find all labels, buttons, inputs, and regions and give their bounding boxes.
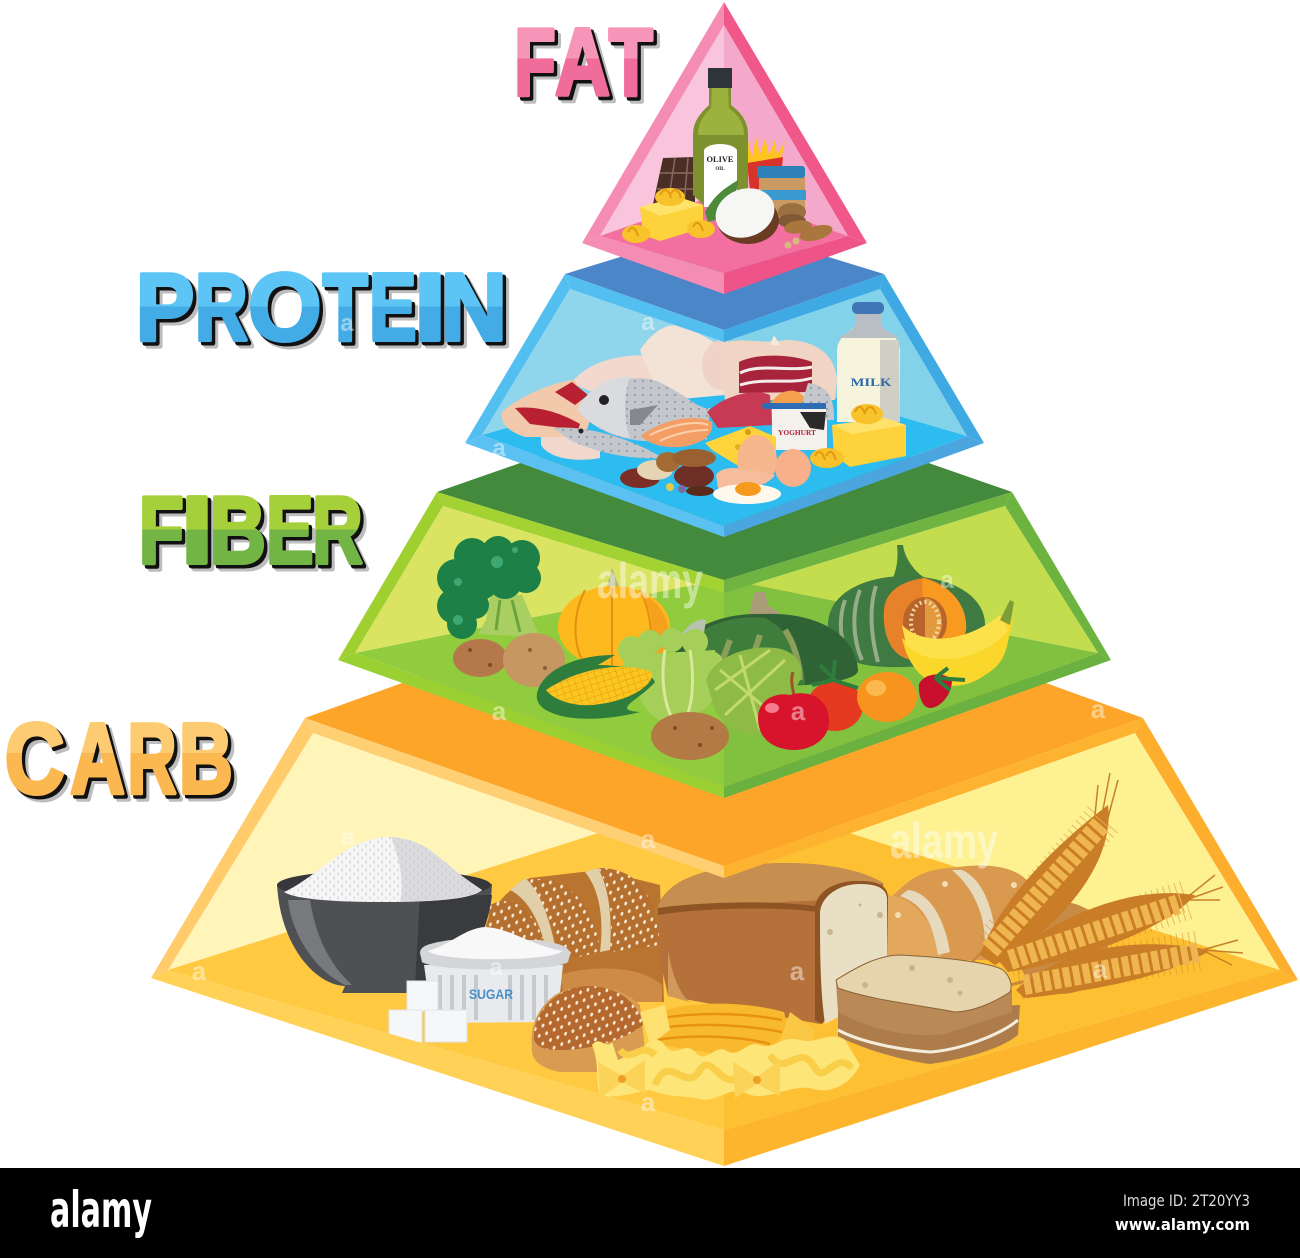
watermarks: a [489,954,503,981]
label: FAT: T [612,12,656,119]
label: PROTEIN: O [254,260,328,367]
protein left wall [482,289,724,435]
label: PROTEIN: O [248,254,322,361]
label: FAT: F [514,9,556,116]
label: PROTEIN: R [198,257,251,364]
carb right wall [724,733,1280,970]
label: PROTEIN: T [326,257,371,364]
label: FIBER [139,477,369,590]
label: PROTEIN: N [441,254,507,361]
label: FIBER: I [184,480,216,587]
food: strawberry [919,668,965,708]
food: chicken pile [541,325,837,460]
label: PROTEIN: E [372,257,420,364]
label: FIBER: I [187,483,219,590]
label: FAT: T [609,9,653,116]
food: artichoke [706,647,801,735]
watermarks: a [791,696,806,726]
food: peanut butter jar [757,166,806,217]
footer bar [0,1168,1300,1258]
label: FIBER: R [312,477,363,584]
label: PROTEIN: I [414,254,446,361]
label: PROTEIN: I [420,260,452,367]
label: FIBER: B [210,477,266,584]
watermarks: a [192,956,207,986]
footer logo: alamy [50,1181,152,1239]
food: potatoes left [453,633,565,687]
watermarks [192,309,1108,1117]
food: tomato [807,660,863,731]
food: sardine [553,427,663,458]
watermarks: a [1091,694,1106,724]
watermarks: a [641,824,656,854]
tier: carb [151,567,1298,1166]
food: sliced bread loaf [658,863,888,1024]
food: milk bottle: MILK [850,375,892,389]
label: FAT: A [555,9,610,116]
watermarks: alamy [597,553,703,609]
food: coconut [709,180,781,246]
label: PROTEIN: E [369,254,417,361]
label: FIBER: E [266,477,314,584]
label: FIBER: B [212,480,269,587]
fiber plate [437,392,1012,580]
label: PROTEIN: P [139,257,197,364]
label: FAT [514,9,659,122]
fiber frame [338,492,1111,798]
food: eggs [716,435,811,489]
food: peanuts [783,219,834,248]
label: PROTEIN: I [417,257,449,364]
food: olive oil bottle: OLIVE [706,155,734,164]
watermarks: a [340,310,354,337]
label: PROTEIN: O [251,257,325,364]
food: cut kabocha [828,545,985,667]
label: CARB: A [73,706,128,818]
food: apple [758,672,829,750]
protein floor [482,365,967,526]
fiber left wall [355,506,724,653]
food: corn [537,655,655,719]
food: yoghurt [762,383,834,450]
label: CARB: C [11,709,71,821]
label: FAT: T [615,15,659,122]
label: PROTEIN: E [375,260,423,367]
watermarks: a [641,1087,656,1117]
food: olive oil bottle: OIL [715,167,725,172]
watermarks: a [641,309,655,336]
food: wheat [972,773,1243,998]
watermarks: a [790,956,805,986]
image id: Image ID: 2T20YY3 [1123,1191,1250,1210]
fat right wall [724,25,848,236]
food: sugar cubes [389,981,467,1042]
label: PROTEIN: N [447,260,513,367]
label: PROTEIN: R [201,260,254,367]
label: FIBER: B [216,483,272,590]
food: bowl of rice [277,837,492,993]
food: yoghurt: YOGHURT [778,429,816,437]
food: green squash [672,592,858,686]
label: FAT: F [520,15,562,122]
label: FIBER: R [315,480,366,587]
label: FIBER: E [272,483,320,590]
label: FAT: A [561,15,616,122]
label: FIBER: E [269,480,317,587]
watermarks: a [940,567,954,594]
carb left wall [168,733,724,970]
tier: fat [582,2,867,294]
carb plate [305,567,1143,866]
watermarks: a [1093,954,1108,984]
food: lettuce [618,628,724,720]
food: orange [857,672,917,722]
fat left wall [600,25,724,236]
food: right bread loaf [888,865,1108,994]
label: CARB: A [76,709,131,821]
food: cookies [778,203,806,228]
label: CARB: B [185,709,239,821]
label: FAT: F [517,12,559,119]
food: salmon steak [641,418,712,447]
food: potato front [651,712,729,760]
label: FIBER: I [181,477,213,584]
label: CARB: R [133,709,183,821]
label: FIBER: F [142,480,187,587]
food: cheese [705,426,776,470]
label: FAT: A [558,12,613,119]
label: FIBER: F [145,483,190,590]
label: FIBER: F [139,477,184,584]
food: seeded baguette [486,868,664,1002]
label: CARB: R [130,706,180,818]
food: toast stack [836,955,1020,1064]
food: steak [502,380,590,437]
food: nuts [620,449,716,496]
label: PROTEIN: T [329,260,374,367]
food: banana [902,600,1014,686]
food: yellow pumpkin [558,568,670,668]
carb floor [168,793,1280,1130]
label: PROTEIN: N [444,257,510,364]
food: fried egg [713,482,781,504]
food: sugar ramekin: SUGAR [469,986,513,1002]
label: FIBER: R [318,483,369,590]
label: PROTEIN: P [136,254,194,361]
fiber floor [355,579,1098,787]
fiber right wall [724,506,1098,653]
label: PROTEIN: R [195,254,248,361]
food: sea bream [577,376,710,441]
food: red meat [707,392,772,428]
fat floor [600,192,848,273]
food: chocolate [653,157,695,204]
watermarks: a [492,435,506,462]
food: butter with curls [810,404,906,468]
website: www.alamy.com [1115,1215,1250,1234]
food: olive oil bottle [693,68,748,207]
food: seeded bun [532,986,645,1072]
food: broccoli [437,536,541,639]
label: CARB: C [8,706,68,818]
carb frame [151,718,1298,1166]
label: CARB: A [70,703,125,815]
protein frame [465,274,984,537]
protein plate [565,225,884,330]
label: CARB: B [179,703,233,815]
label: PROTEIN [136,254,513,367]
label: PROTEIN: P [142,260,200,367]
label: CARB: C [5,703,65,815]
label: CARB: B [182,706,236,818]
watermarks: a [492,696,507,726]
label: CARB [5,703,239,821]
watermarks: alamy [890,813,998,869]
protein right wall [724,289,967,436]
food: butter block [622,188,715,243]
food: sugar ramekin [420,927,570,1023]
tier: fiber [338,392,1111,798]
watermarks: a [341,824,355,851]
food: milk bottle [837,302,900,422]
label: PROTEIN: T [323,254,368,361]
food: fries [746,136,785,190]
tier: protein [465,225,984,537]
food: bacon [739,356,812,393]
food: green leaves [705,180,738,222]
food: pasta [592,1004,860,1100]
label: CARB: R [127,703,177,815]
fat frame [582,2,867,294]
